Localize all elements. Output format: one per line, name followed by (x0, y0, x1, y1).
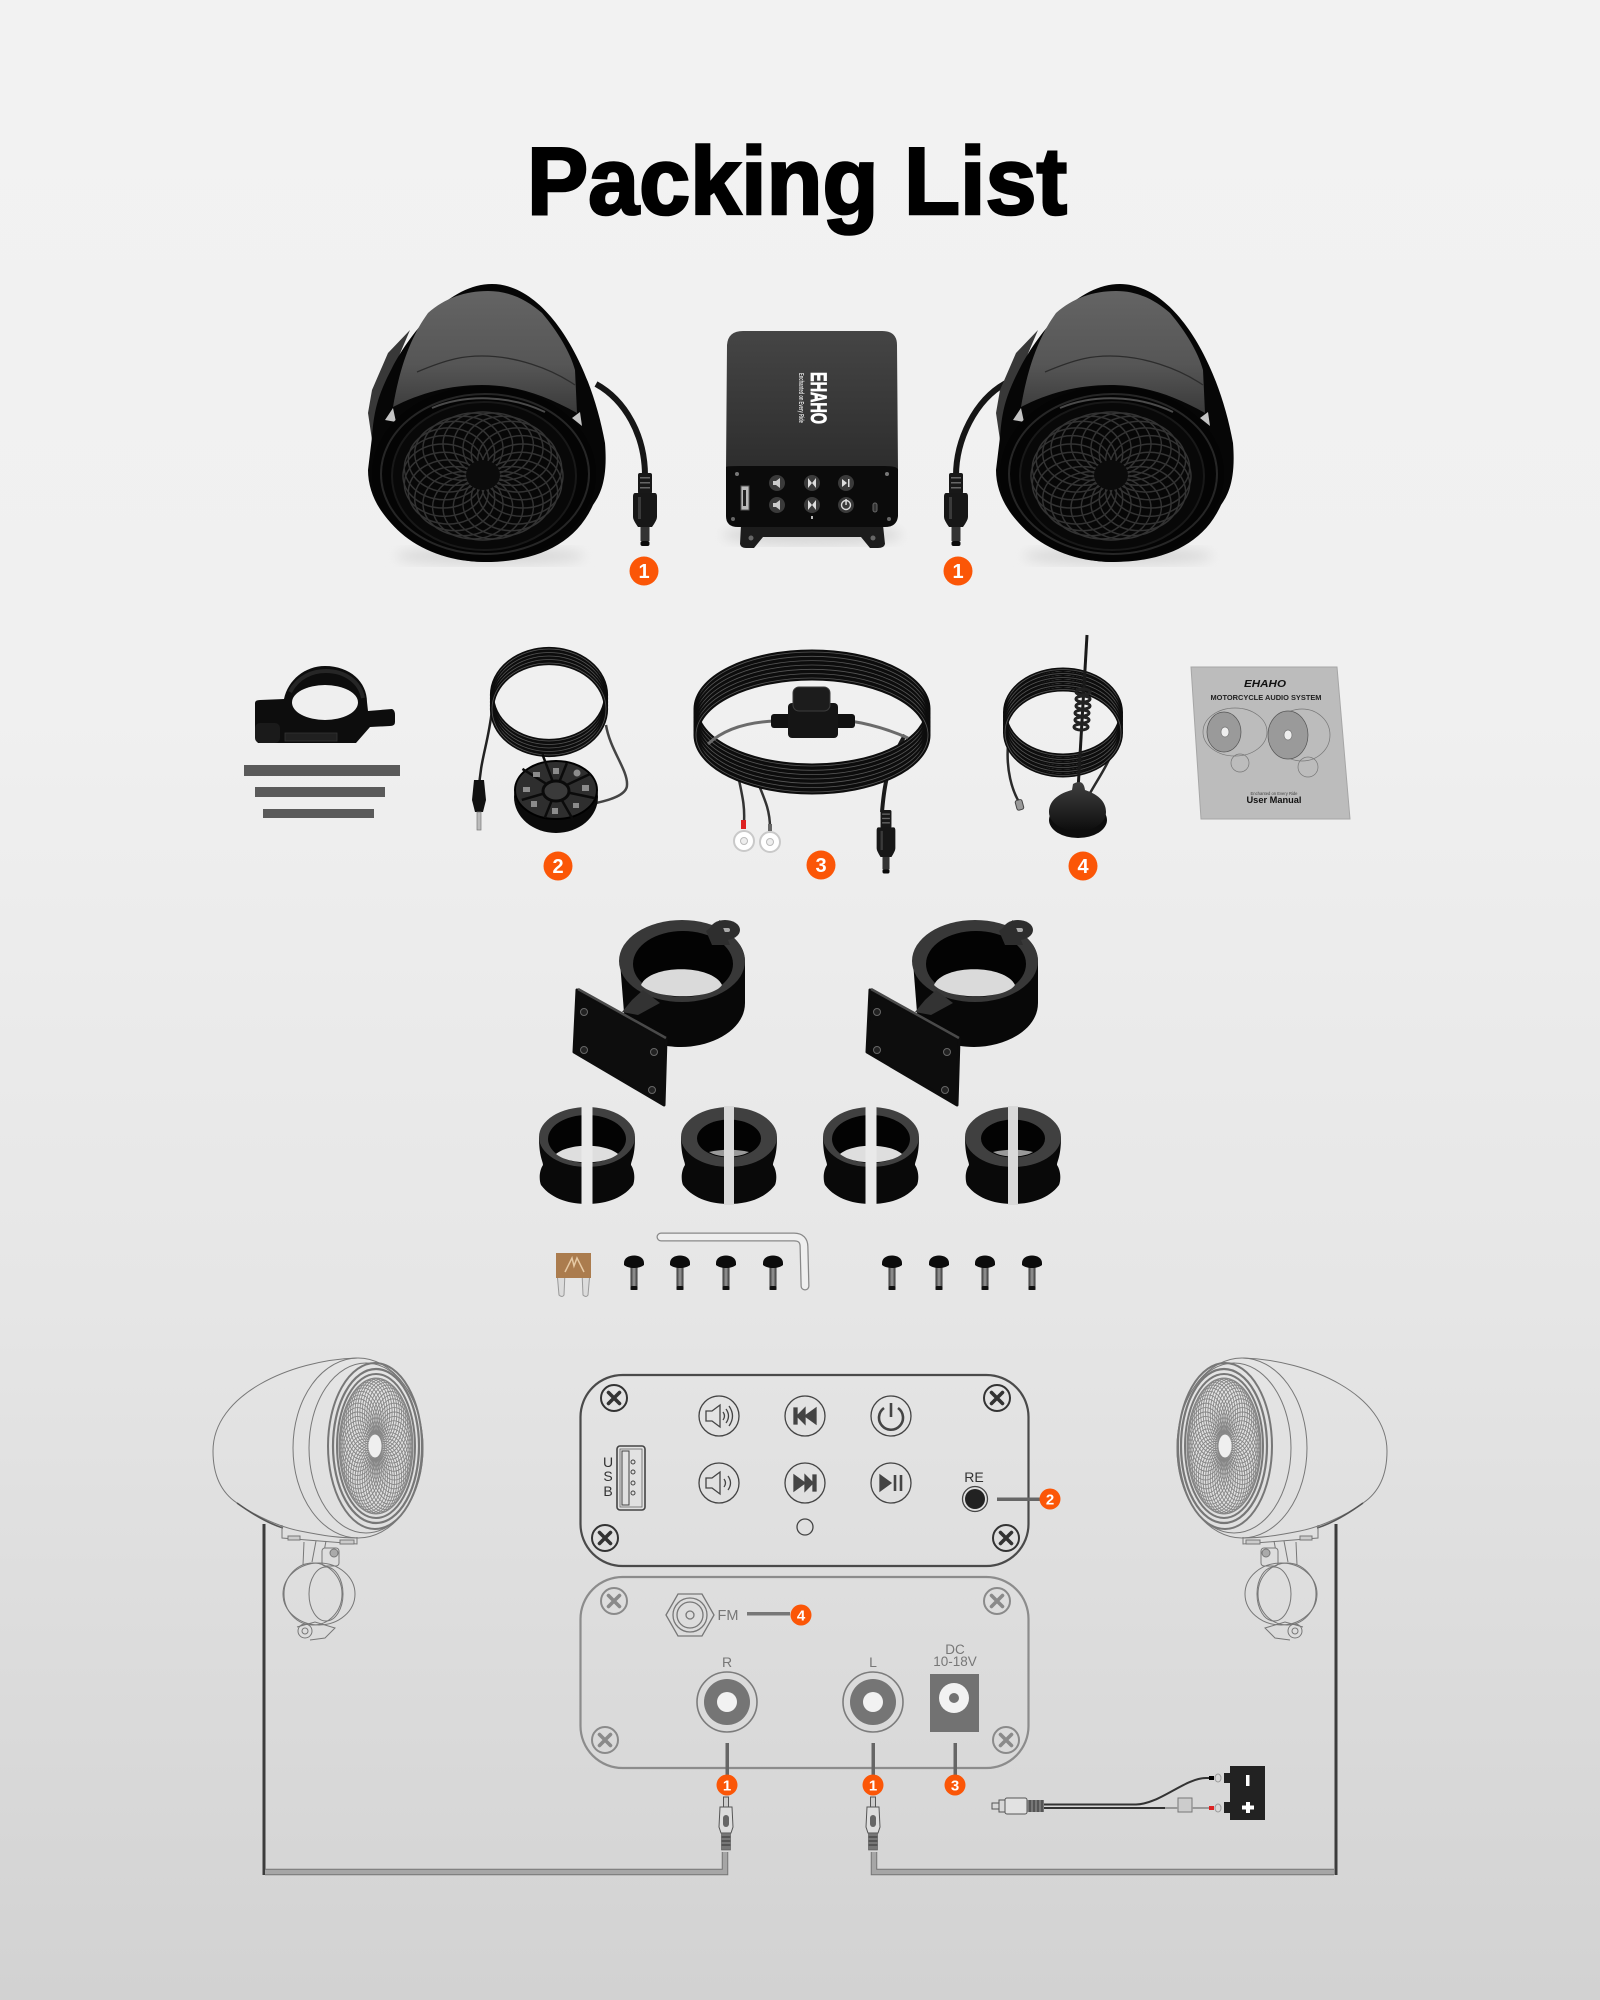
amplifier logo: EHAHO (806, 372, 831, 424)
USB port: B (603, 1483, 613, 1499)
mounting clamp right (867, 920, 1038, 1105)
right speaker (944, 284, 1275, 581)
FM antenna connector: 4 (797, 1608, 806, 1624)
panel: wiring diagram (213, 1299, 1387, 1875)
badge 1 R channel: 1 (723, 1778, 731, 1794)
RCA plug right (866, 1797, 880, 1850)
RE remote jack (962, 1469, 1060, 1512)
USB port (603, 1446, 645, 1510)
RE remote jack: RE (964, 1469, 984, 1485)
left speaker (322, 284, 657, 581)
amplifier logo (797, 372, 831, 424)
rubber bushing 3 (823, 1106, 919, 1205)
panel: mounting hardware (539, 920, 1061, 1296)
badge 2: 2 (552, 856, 564, 878)
R speaker jack (697, 1654, 757, 1732)
remote control dial (509, 749, 603, 833)
USB port: S (603, 1468, 613, 1484)
power cable with fuse holder (696, 652, 928, 874)
front panel diagram (580, 1375, 1060, 1566)
badge 1 L channel: 1 (869, 1778, 877, 1794)
badge 3 DC (944, 1774, 966, 1796)
rear panel diagram (580, 1577, 1028, 1768)
user manual: Enchanted on Every Ride (1250, 791, 1298, 796)
front panel buttons (699, 1396, 911, 1535)
title: Packing List (527, 128, 1067, 235)
blade fuse (556, 1253, 591, 1296)
line drawing speaker left (213, 1299, 460, 1640)
badge 1 right: 1 (952, 561, 964, 583)
badge 4 (1068, 852, 1098, 880)
allen key (661, 1237, 805, 1286)
DC power jack (930, 1642, 979, 1732)
FM antenna connector: FM (718, 1608, 738, 1624)
panel: main components row (322, 284, 1275, 586)
mounting screws (624, 1256, 1042, 1290)
FM antenna (1005, 635, 1121, 838)
user manual: MOTORCYCLE AUDIO SYSTEM (1210, 693, 1322, 702)
DC power jack: DC (945, 1642, 965, 1657)
badge 3 DC: 3 (951, 1778, 959, 1794)
FM antenna connector (666, 1594, 812, 1636)
USB port: U (603, 1454, 613, 1470)
remote control cable (472, 649, 627, 833)
badge 3: 3 (815, 855, 827, 877)
amplifier logo: Enchanted on Every Ride (797, 373, 804, 423)
badge 3 (806, 850, 836, 880)
badge 4: 4 (1077, 856, 1089, 878)
RCA plug left (719, 1797, 733, 1850)
battery (1224, 1766, 1265, 1820)
user manual: User Manual (1246, 795, 1302, 805)
rubber bushing 4 (965, 1106, 1061, 1205)
L speaker jack: L (869, 1654, 877, 1670)
badge 1 L channel (862, 1774, 884, 1796)
badge 1 left (630, 556, 658, 586)
amplifier buttons (741, 475, 877, 519)
mounting clamp left (574, 920, 745, 1105)
power harness to battery (992, 1766, 1265, 1820)
speaker wire right (874, 1524, 1336, 1875)
rear panel screws (592, 1588, 1019, 1753)
badge 1 right (944, 556, 972, 586)
rubber bushing 1 (539, 1106, 635, 1205)
handlebar clip with adhesive strips (244, 666, 400, 818)
RE remote jack: 2 (1046, 1492, 1054, 1508)
R speaker jack: R (722, 1654, 732, 1670)
user manual: EHAHO (1244, 679, 1286, 690)
rubber bushing 2 (681, 1106, 777, 1205)
L speaker jack (843, 1654, 903, 1732)
badge 1 R channel (716, 1774, 738, 1796)
badge 2 (544, 852, 572, 880)
user manual (1191, 667, 1350, 819)
speaker wire left (264, 1524, 725, 1875)
amplifier unit (722, 331, 902, 548)
badge 1 left: 1 (638, 561, 650, 583)
panel: accessories row (244, 635, 1350, 880)
line drawing speaker right (1140, 1299, 1387, 1640)
DC power jack: 10-18V (933, 1654, 977, 1669)
connector leader lines and badges (716, 1743, 966, 1796)
front panel screws (592, 1385, 1019, 1551)
